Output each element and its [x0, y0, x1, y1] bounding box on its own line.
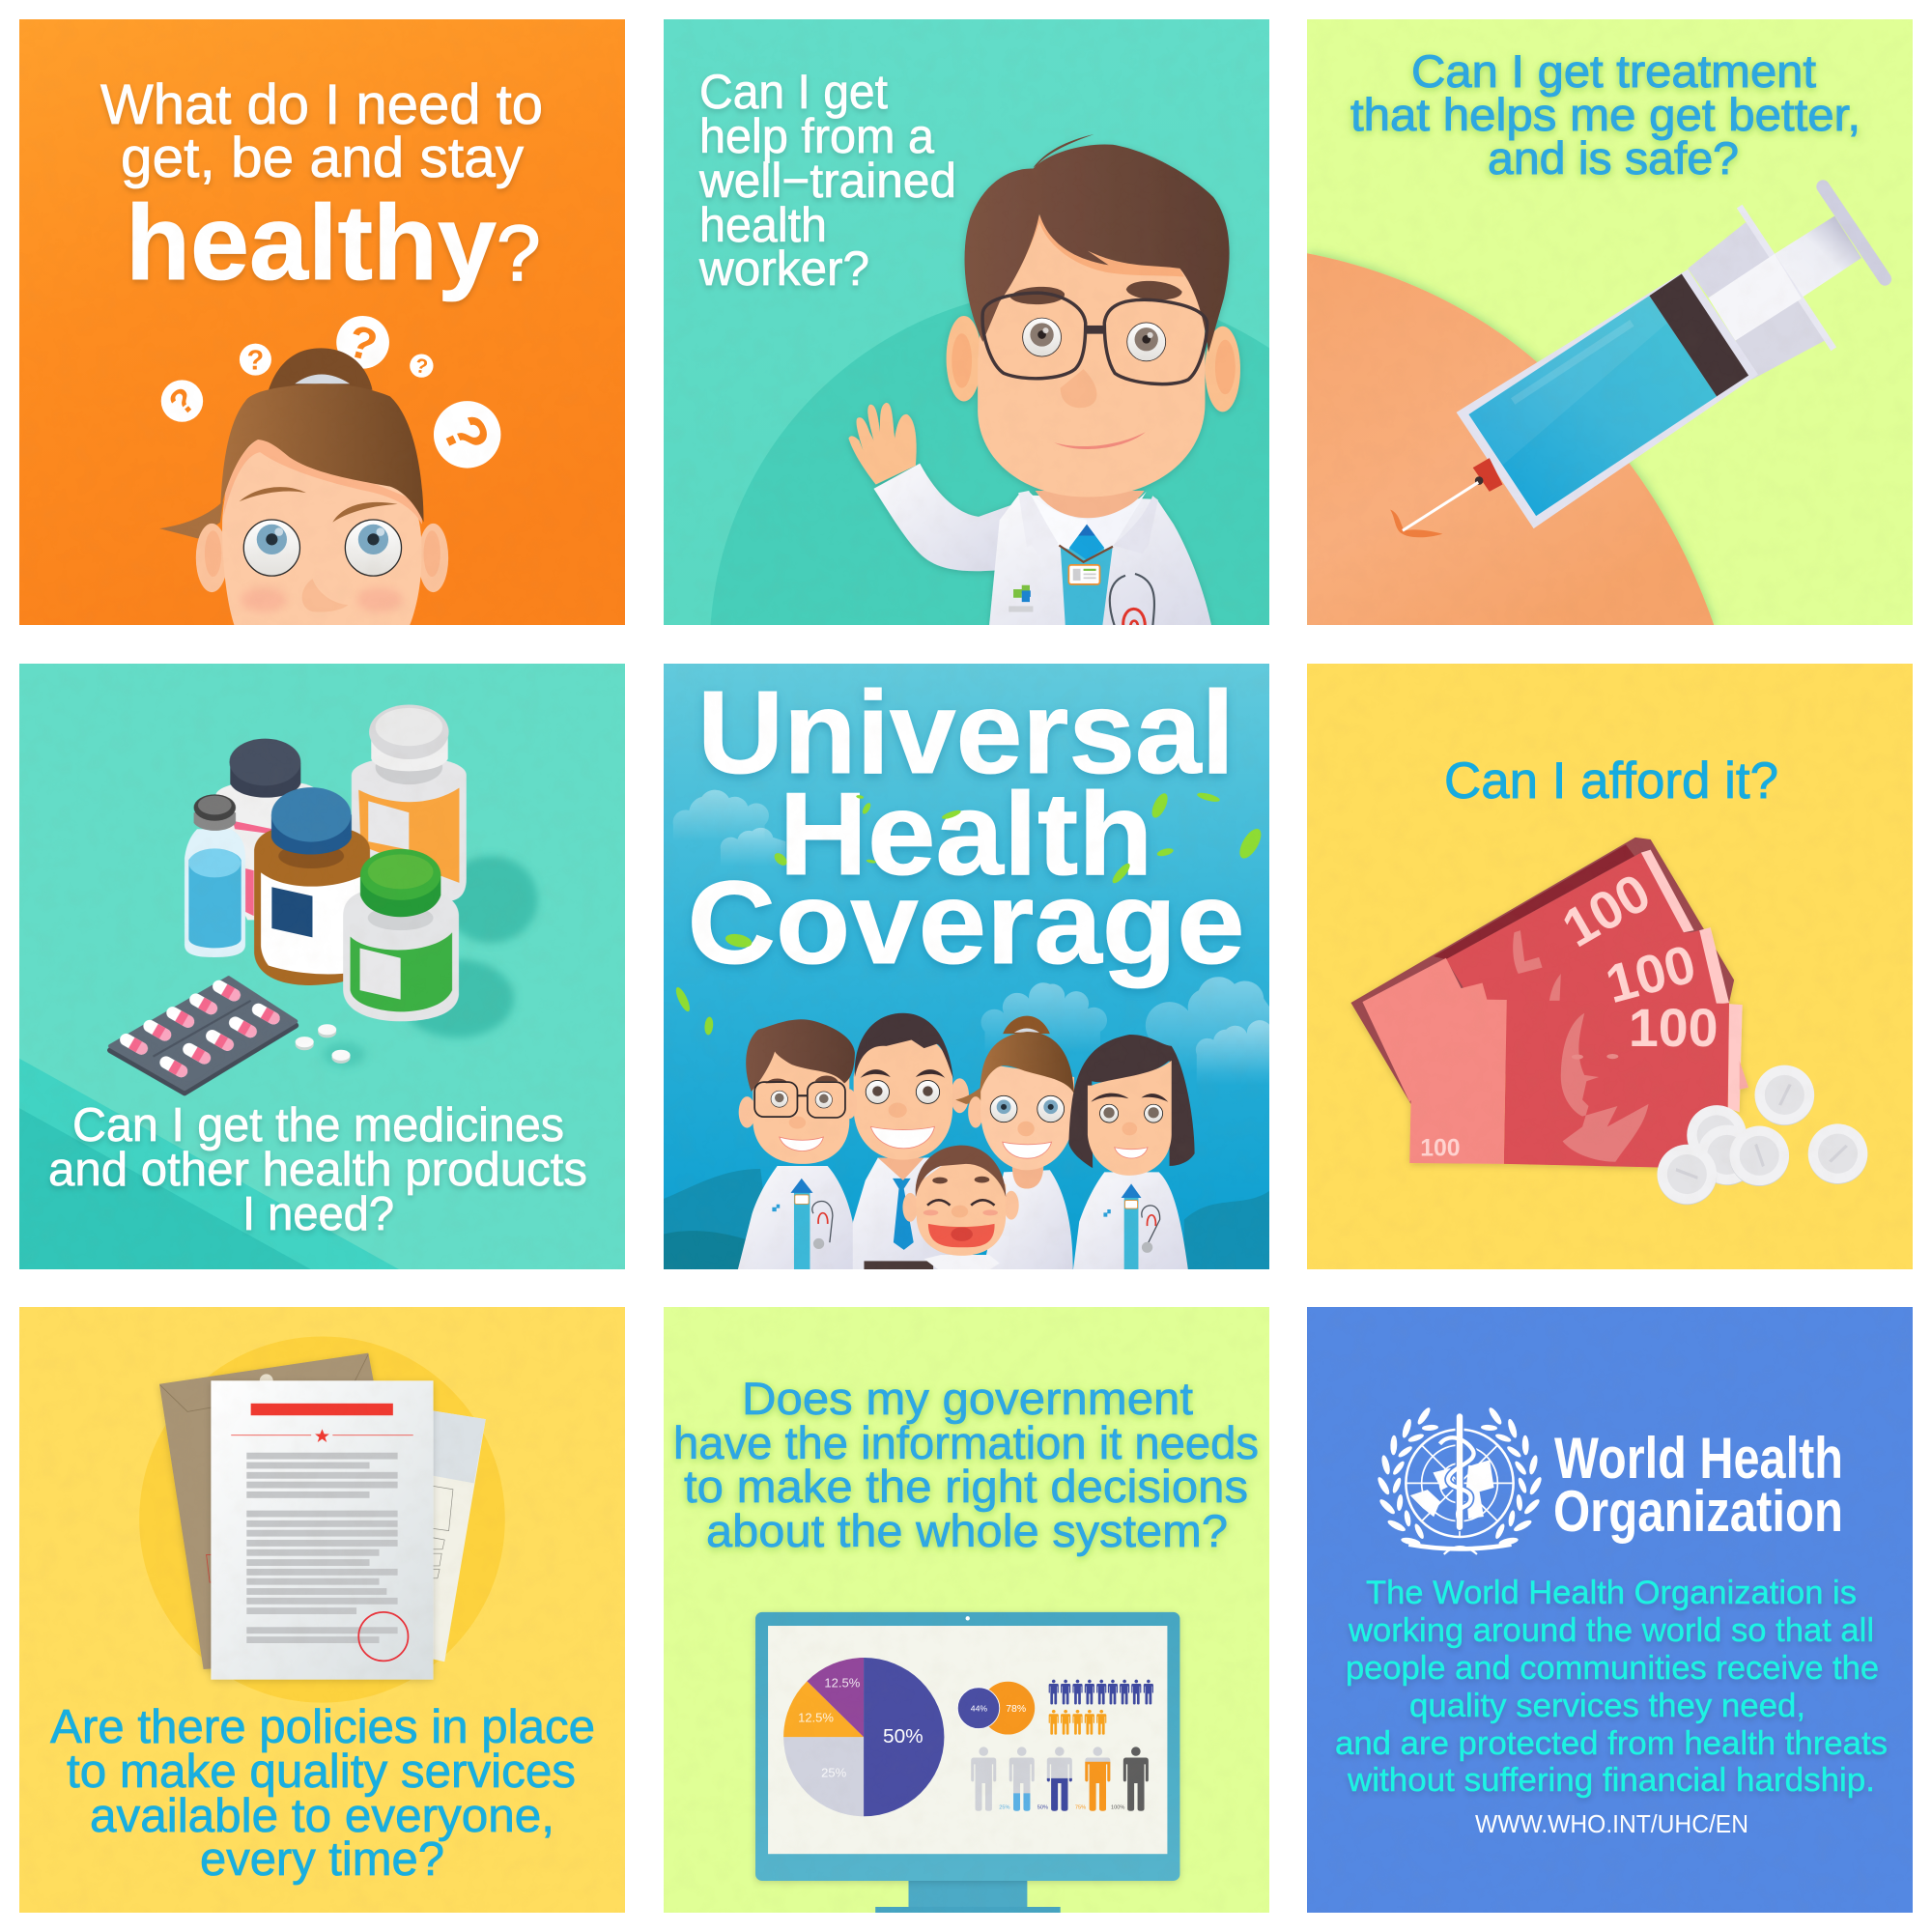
description text — [1335, 1575, 1888, 1799]
orange bottle — [352, 704, 467, 901]
heading: treatment: Can I get treatment — [1411, 45, 1816, 97]
question mark bubbles: ? — [161, 380, 203, 423]
venn diagram — [957, 1682, 1035, 1735]
panel: well-trained health worker — [664, 19, 1269, 625]
heading: what do I need: get, be and stay — [121, 127, 524, 189]
question mark bubbles: ? — [413, 355, 429, 379]
panel: medicines — [19, 664, 625, 1271]
heading: well-trained health worker — [698, 65, 956, 296]
percentage people: 50% — [1037, 1805, 1048, 1811]
panel: safe treatment — [1307, 19, 1913, 627]
heading: well-trained health worker: help from a — [699, 109, 934, 163]
heading: policies: available to everyone, — [90, 1790, 554, 1842]
bottle shadows — [323, 856, 538, 1066]
arm — [1307, 253, 1715, 627]
navy people row — [1049, 1680, 1153, 1705]
woman with ponytail — [955, 1016, 1086, 1271]
description text: The World Health Organization is — [1366, 1575, 1857, 1611]
description text: and are protected from health threats — [1335, 1725, 1888, 1762]
panel: what do I need to be healthy — [19, 19, 625, 627]
pie chart — [783, 1658, 944, 1816]
heading: medicines: and other health products — [48, 1144, 587, 1196]
coins: I — [1823, 1136, 1852, 1172]
venn diagram: 44% — [971, 1704, 987, 1714]
hills — [663, 1169, 1272, 1271]
illustration: policy document — [139, 1336, 505, 1703]
syringe — [1403, 186, 1885, 530]
baby — [902, 1146, 1019, 1271]
heading: policies: to make quality services — [67, 1746, 576, 1798]
question mark bubbles: ? — [343, 315, 383, 371]
title: Universal Health Coverage: Health — [779, 768, 1153, 899]
banknote values: 100 — [1629, 998, 1719, 1058]
question mark bubbles: ? — [247, 346, 264, 377]
panel: government information — [664, 1307, 1269, 1919]
heading: treatment: that helps me get better, — [1350, 89, 1861, 140]
title: Universal Health Coverage — [688, 667, 1244, 988]
panel: policies — [19, 1307, 625, 1913]
blister pack — [110, 978, 296, 1093]
illustration: medicine bottles and pills — [19, 704, 538, 1271]
heading: policies: every time? — [200, 1833, 444, 1886]
woman doctor — [1068, 1035, 1195, 1271]
back sheet — [432, 1411, 486, 1662]
heading: what do I need — [100, 73, 543, 302]
wordmark: World Health Organization: World Health — [1554, 1426, 1843, 1491]
heading: information: Does my government — [742, 1374, 1193, 1425]
heading: medicines: I need? — [242, 1188, 394, 1240]
heading: well-trained health worker: well−trained — [698, 154, 956, 208]
yellow panel background — [1307, 664, 1913, 1269]
illustration: sky and family — [663, 790, 1272, 1271]
heading: medicines — [48, 1099, 587, 1240]
description text: working around the world so that all — [1348, 1612, 1874, 1649]
question mark bubbles: ? — [430, 406, 503, 465]
banknote values: 100 — [1420, 1135, 1461, 1161]
panel: universal health coverage — [663, 664, 1272, 1271]
yellow panel background — [19, 1307, 625, 1913]
pie chart: 25% — [821, 1766, 847, 1780]
sky background — [664, 664, 1269, 1269]
illustration: confused woman with question marks — [159, 315, 503, 627]
monitor — [755, 1612, 1179, 1919]
teal panel background — [664, 19, 1269, 625]
illustration: monitor with charts — [755, 1612, 1179, 1919]
heading: information — [673, 1374, 1259, 1557]
brown bottle — [254, 787, 370, 985]
panel: World Health Organization — [1307, 1307, 1913, 1913]
leaves over title — [724, 795, 1132, 950]
heading: well-trained health worker: Can I get — [699, 65, 888, 119]
lime panel background — [1307, 19, 1913, 625]
injection mark — [1390, 510, 1442, 537]
diagonal bands — [19, 1059, 403, 1271]
doctor figure — [848, 134, 1240, 627]
website address: WWW.WHO.INT/UHC/EN — [1475, 1811, 1748, 1838]
document header — [231, 1404, 413, 1442]
illustration: banknotes and coins — [1350, 838, 1867, 1205]
title: Universal Health Coverage: Coverage — [688, 857, 1244, 988]
backdrop circle — [139, 1336, 505, 1703]
question mark bubbles — [161, 315, 503, 469]
heading: policies: Are there policies in place — [50, 1701, 595, 1753]
percentage people — [971, 1747, 1149, 1811]
blue panel background — [1307, 1307, 1913, 1913]
envelope — [159, 1353, 419, 1669]
heading: what do I need: What do I need to — [100, 73, 543, 136]
teal panel background — [19, 664, 625, 1269]
vial — [185, 794, 245, 957]
description text: without suffering financial hardship. — [1347, 1762, 1875, 1799]
red seal — [358, 1612, 408, 1661]
background arc — [710, 289, 1432, 1010]
title: Universal Health Coverage: Universal — [697, 667, 1235, 798]
loose tablets — [296, 1024, 351, 1064]
description text: quality services they need, — [1409, 1688, 1805, 1724]
pie chart: 12.5% — [798, 1711, 835, 1725]
heading: what do I need: healthy — [126, 184, 497, 302]
heading: afford: Can I afford it? — [1444, 753, 1778, 810]
heading: information: about the whole system? — [706, 1506, 1228, 1557]
green bottle — [343, 849, 459, 1021]
orange people row — [1049, 1710, 1106, 1735]
banknote values: 100 — [1552, 862, 1661, 958]
main sheet — [211, 1380, 434, 1680]
heading: well-trained health worker: health — [699, 198, 827, 252]
wordmark: World Health Organization: Organization — [1553, 1479, 1843, 1544]
orange panel background — [19, 19, 625, 625]
doctor with glasses — [737, 1019, 857, 1271]
heading: what do I need: ? — [497, 210, 541, 298]
panel: can I afford it — [1307, 664, 1913, 1269]
banknotes — [1350, 838, 1748, 1169]
wordmark: World Health Organization — [1553, 1426, 1843, 1544]
illustration: syringe in arm — [1307, 186, 1885, 627]
coins: I — [1776, 1076, 1794, 1115]
banknote values: 100 — [1600, 933, 1702, 1014]
coins: I — [1668, 1166, 1707, 1182]
pie chart: 12.5% — [824, 1675, 861, 1690]
heading: treatment — [1350, 45, 1861, 184]
coins: I — [1747, 1138, 1774, 1175]
illustration: waving doctor — [710, 134, 1432, 1010]
clouds — [673, 790, 1272, 1086]
heading: well-trained health worker: worker? — [698, 242, 869, 296]
heading: information: have the information it needs — [673, 1418, 1259, 1469]
heading: treatment: and is safe? — [1488, 132, 1739, 184]
woman head — [159, 348, 448, 627]
pie chart: 50% — [883, 1725, 923, 1747]
percentage people: 75% — [1075, 1805, 1086, 1811]
dark cap bottle — [216, 739, 314, 920]
banknote values — [1420, 862, 1719, 1161]
coins — [1658, 1065, 1867, 1205]
heading: information: to make the right decisions — [684, 1462, 1248, 1513]
man in shirt — [841, 1013, 969, 1271]
lime panel background — [664, 1307, 1269, 1913]
percentage people: 100% — [1111, 1805, 1124, 1811]
document text lines — [246, 1453, 398, 1643]
icon: WHO emblem — [1376, 1405, 1544, 1554]
venn diagram: 78% — [1006, 1704, 1026, 1715]
leaves — [673, 791, 1265, 1036]
heading: medicines: Can I get the medicines — [72, 1099, 564, 1151]
heading: policies — [50, 1701, 595, 1886]
description text: people and communities receive the — [1346, 1650, 1879, 1687]
percentage people: 25% — [999, 1805, 1010, 1811]
